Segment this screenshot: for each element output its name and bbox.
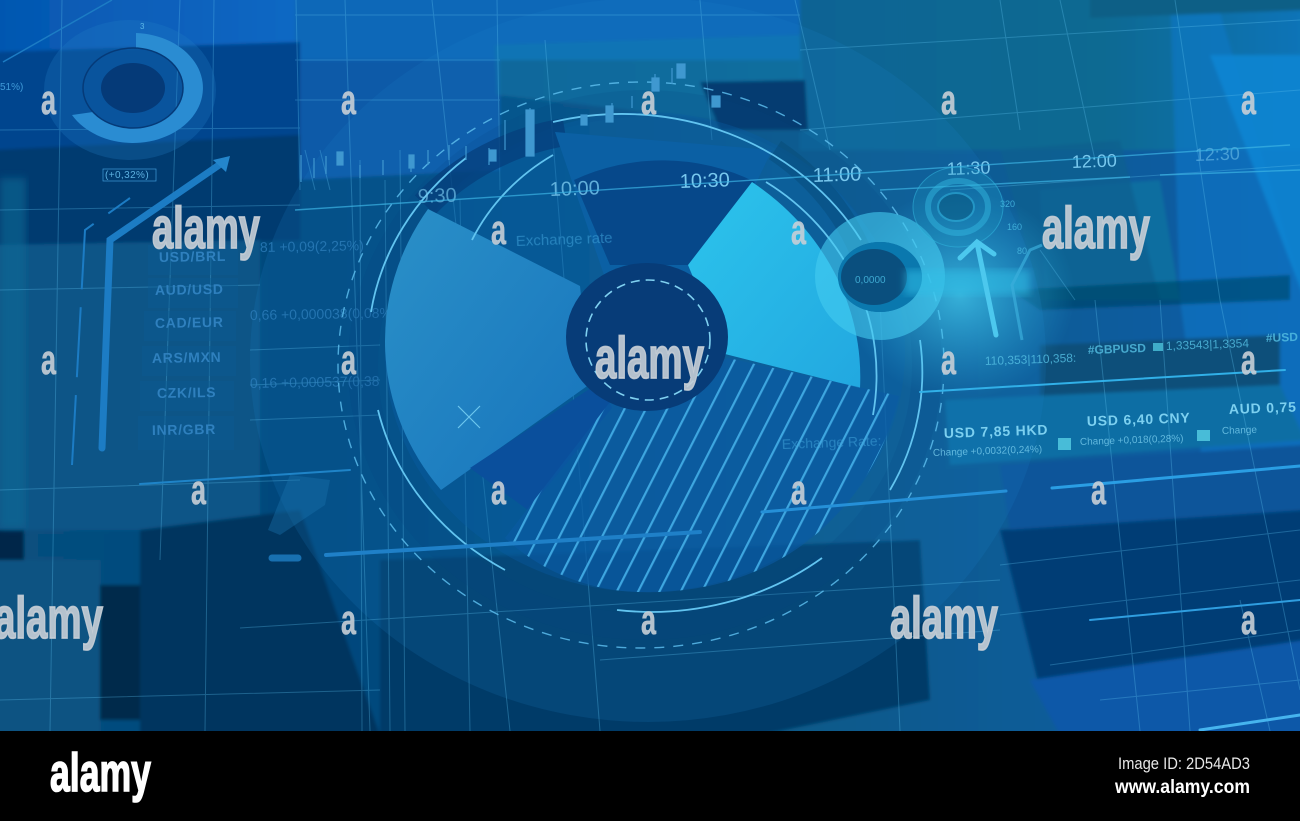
watermark: small tiles: a	[1241, 596, 1256, 643]
chart scale labels: 320	[1000, 199, 1015, 209]
glow behind bright area	[845, 190, 1075, 400]
currency pairs table: AUD/USD	[155, 281, 224, 298]
ring chart: right: 0,0000	[855, 275, 886, 286]
percent tag: (+0,32%)	[105, 170, 149, 181]
currency pairs table: CAD/EUR	[155, 314, 224, 331]
left cyan wedge	[385, 209, 590, 490]
time axis labels: 12:00	[1071, 150, 1117, 172]
right bright wedge	[688, 182, 860, 388]
website: www.alamy.com	[1114, 777, 1250, 798]
ring chart: top left	[0, 20, 216, 160]
currency quote: CNY: Change +0,018(0,28%)	[1080, 433, 1184, 448]
watermark: small tiles: a	[491, 206, 506, 253]
watermark: small tiles: a	[41, 336, 56, 383]
change values	[250, 237, 397, 391]
watermark: large: alamy	[152, 196, 260, 261]
quote ticker: #USD	[1266, 330, 1298, 345]
watermark: small tiles: a	[791, 206, 806, 253]
watermark: small tiles: a	[791, 466, 806, 513]
watermark: small tiles: a	[941, 76, 956, 123]
watermark: small tiles: a	[641, 76, 656, 123]
watermark: small tiles	[41, 76, 1256, 643]
ring chart: top left: 3	[140, 22, 145, 31]
quote ticker: 110,353|110,358:	[985, 351, 1076, 368]
time axis labels: 9:30	[417, 185, 457, 208]
solid ring arcs	[371, 114, 922, 612]
large translucent circle	[250, 0, 1046, 722]
watermark: large	[0, 196, 1150, 651]
time axis labels	[417, 143, 1240, 208]
chart scale labels: 80	[1017, 246, 1027, 256]
quote ticker	[985, 330, 1298, 368]
watermark: small tiles: a	[1241, 336, 1256, 383]
currency pairs table	[138, 245, 238, 450]
footer bar	[0, 731, 1300, 821]
watermark: small tiles: a	[1241, 76, 1256, 123]
watermark: small tiles: a	[341, 76, 356, 123]
time axis rules	[295, 145, 1300, 210]
lower dark wedge	[470, 382, 612, 510]
watermark: large: alamy	[890, 586, 998, 651]
change values: 81 +0,09(2,25%)	[260, 237, 364, 255]
top dark wedge	[555, 132, 772, 275]
bright bar from ring	[905, 270, 1030, 295]
arrow: rising right	[960, 242, 996, 335]
watermark: small tiles: a	[341, 336, 356, 383]
ring chart: right	[815, 212, 945, 340]
dashed outer ring	[338, 82, 944, 648]
ring chart: upper right	[913, 167, 1003, 247]
currency quote: HKD: USD 7,85 HKD	[944, 421, 1049, 441]
image id: Image ID: 2D54AD3	[1118, 754, 1250, 773]
currency quote: AUD: Change	[1222, 425, 1258, 437]
radial disc	[385, 112, 905, 592]
footer logo: alamy	[50, 743, 151, 803]
highlight rules	[140, 370, 1300, 730]
radial outer dark band	[348, 90, 942, 640]
dark band over wedge	[574, 160, 755, 265]
time axis labels: 11:00	[812, 163, 862, 187]
dark arc band upper left	[425, 132, 565, 205]
currency quote: CNY	[1080, 409, 1210, 448]
watermark: small tiles: a	[641, 596, 656, 643]
centre disc	[566, 263, 728, 411]
quote ticker: 1,33543|1,3354	[1166, 336, 1250, 353]
centre dashed ring	[586, 280, 710, 400]
exchange rate label: Exchange Rate:	[782, 433, 882, 452]
watermark: large: alamy	[595, 326, 704, 391]
currency pairs table: ARS/MXN	[152, 349, 222, 366]
currency quote: AUD: AUD 0,75	[1229, 399, 1297, 417]
currency quote: HKD: Change +0,0032(0,24%)	[933, 444, 1042, 459]
hatched wedge	[505, 358, 899, 592]
candlestick chart	[301, 64, 720, 182]
exchange rate label	[516, 230, 882, 452]
ring chart: top left: 51%)	[0, 82, 23, 93]
watermark: large: alamy	[1042, 196, 1150, 261]
exchange rate label: Exchange rate	[516, 230, 613, 250]
watermark: small tiles: a	[191, 466, 206, 513]
watermark: small tiles: a	[41, 76, 56, 123]
watermark: small tiles: a	[1091, 466, 1106, 513]
chart scale labels: 160	[1007, 222, 1022, 232]
quote ticker: #GBPUSD	[1088, 341, 1146, 357]
arrow: rising left	[3, 0, 230, 465]
marker cross	[458, 406, 480, 428]
watermark: small tiles: a	[941, 336, 956, 383]
watermark: small tiles: a	[491, 466, 506, 513]
watermark: small tiles: a	[341, 596, 356, 643]
dark arc band upper right	[775, 150, 875, 300]
chart scale labels	[1000, 199, 1027, 256]
time axis labels: 12:30	[1194, 143, 1240, 165]
currency quote: HKD	[933, 421, 1071, 459]
currency quote: AUD	[1222, 399, 1297, 437]
time axis labels: 10:00	[549, 177, 600, 201]
change values: 0,16 +0,000537(0,38	[250, 373, 380, 391]
currency pairs table: CZK/ILS	[157, 384, 216, 401]
time axis labels: 11:30	[946, 157, 991, 179]
arrow: rising right thin	[1012, 245, 1042, 340]
change values: 0,66 +0,000038(0,08%)	[250, 304, 397, 323]
currency pairs table: USD/BRL	[159, 248, 226, 265]
time axis labels: 10:30	[679, 169, 730, 193]
faded arrow shape	[268, 475, 330, 535]
currency quote: CNY: USD 6,40 CNY	[1087, 409, 1191, 429]
left edge glow strip	[0, 178, 26, 528]
currency pairs table: INR/GBR	[152, 421, 216, 438]
